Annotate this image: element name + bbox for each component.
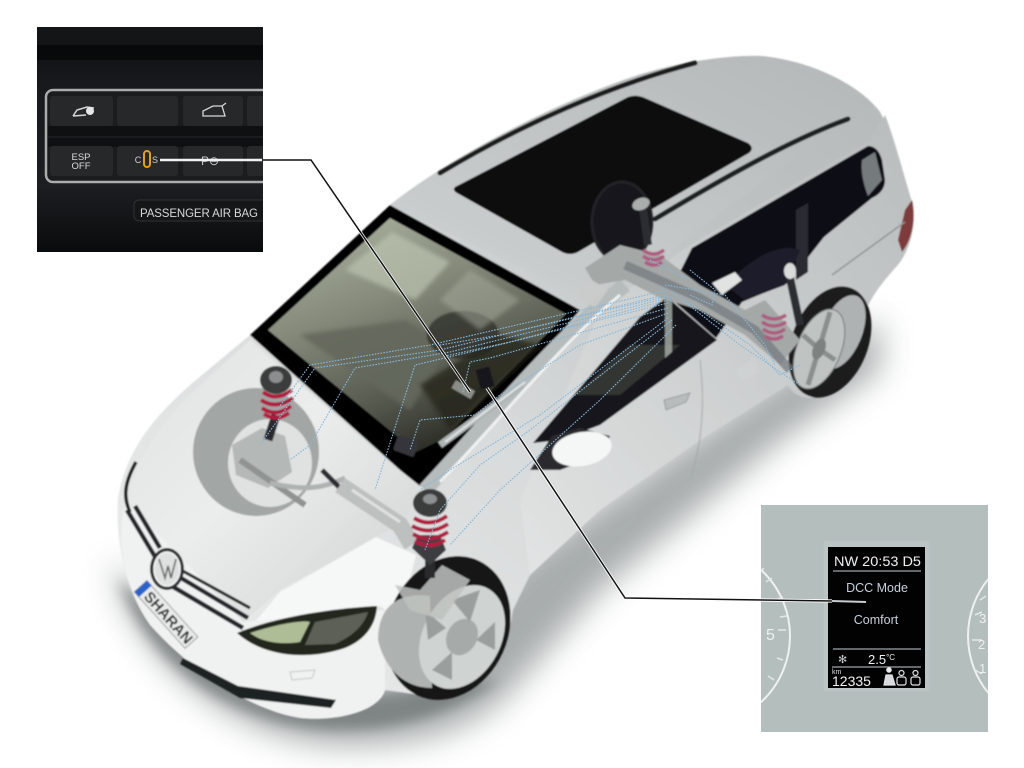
leader line to DCC display: [487, 388, 866, 602]
leader line from button: [160, 160, 470, 392]
dial numerals right: 2: [978, 637, 985, 652]
display: DCC Mode: DCC Mode: [846, 581, 908, 595]
front wing: [250, 537, 416, 628]
number plate: SHARAN: [140, 589, 196, 648]
ESP OFF label: ESP: [71, 152, 91, 163]
panel: instrument cluster display: [761, 505, 988, 732]
front wing dark edge line: [126, 462, 136, 512]
right front wheel: [363, 536, 533, 720]
dial numerals right: 3: [979, 611, 986, 626]
dial numerals right: 1: [979, 661, 986, 676]
steering column and control unit: [393, 367, 525, 457]
blue dotted wiring: [260, 260, 800, 550]
front bumper: [121, 505, 385, 719]
icon: seat belt symbols: [884, 668, 920, 685]
dial numerals right: [978, 611, 986, 676]
icon: snowflake: ✻: [838, 654, 847, 666]
left coil spring: [260, 366, 293, 418]
lower bumper intake: [180, 658, 336, 708]
side body panels: [520, 115, 914, 575]
windshield: [250, 205, 580, 486]
display: temperature: °C: [886, 653, 895, 662]
display: temperature: 2.5: [868, 652, 886, 667]
amber suspension symbol: [144, 151, 150, 167]
letter S: S: [152, 155, 158, 165]
rear coil springs: [643, 250, 786, 339]
OFF label: OFF: [72, 161, 91, 172]
wing mirror: [530, 427, 614, 471]
A-pillar: [425, 285, 625, 490]
VW emblem: [150, 548, 184, 590]
PASSENGER AIR BAG label: PASSENGER AIR BAG: [140, 208, 258, 220]
ghost spare wheel and rear strut: [592, 182, 800, 325]
right strut and coil spring: [412, 489, 448, 578]
dial numeral 5: 5: [766, 627, 775, 644]
roof: [390, 56, 880, 300]
panel: DCC button close-up: [37, 27, 286, 252]
icon: lock dot: [86, 107, 94, 115]
display: km label: km: [832, 669, 842, 676]
display: odometer: 12335: [832, 673, 871, 689]
car ground shadow: [112, 320, 880, 745]
radiator grille: [127, 506, 250, 628]
headlight: [237, 606, 377, 655]
front door window: [533, 297, 717, 443]
sunroof: [454, 96, 752, 254]
C S sport comfort label: C: [135, 155, 142, 165]
display: Comfort: Comfort: [854, 613, 899, 627]
ghosted left front wheel: [193, 388, 319, 516]
icon: car tailgate symbol: [203, 103, 226, 116]
icon: park symbol: P⊖: [201, 154, 219, 168]
icon: car door symbol: [73, 107, 94, 116]
rear wheel: [773, 274, 887, 410]
left suspension and steering parts: [232, 415, 412, 545]
car body silhouette: [117, 56, 914, 719]
hood: [130, 340, 420, 622]
rear axle assembly: [575, 245, 800, 382]
car illustration: [117, 56, 914, 720]
roof rails: [440, 63, 848, 219]
rear side windows: [668, 146, 885, 338]
display: status line: NW 20:53 D5: [834, 553, 921, 569]
